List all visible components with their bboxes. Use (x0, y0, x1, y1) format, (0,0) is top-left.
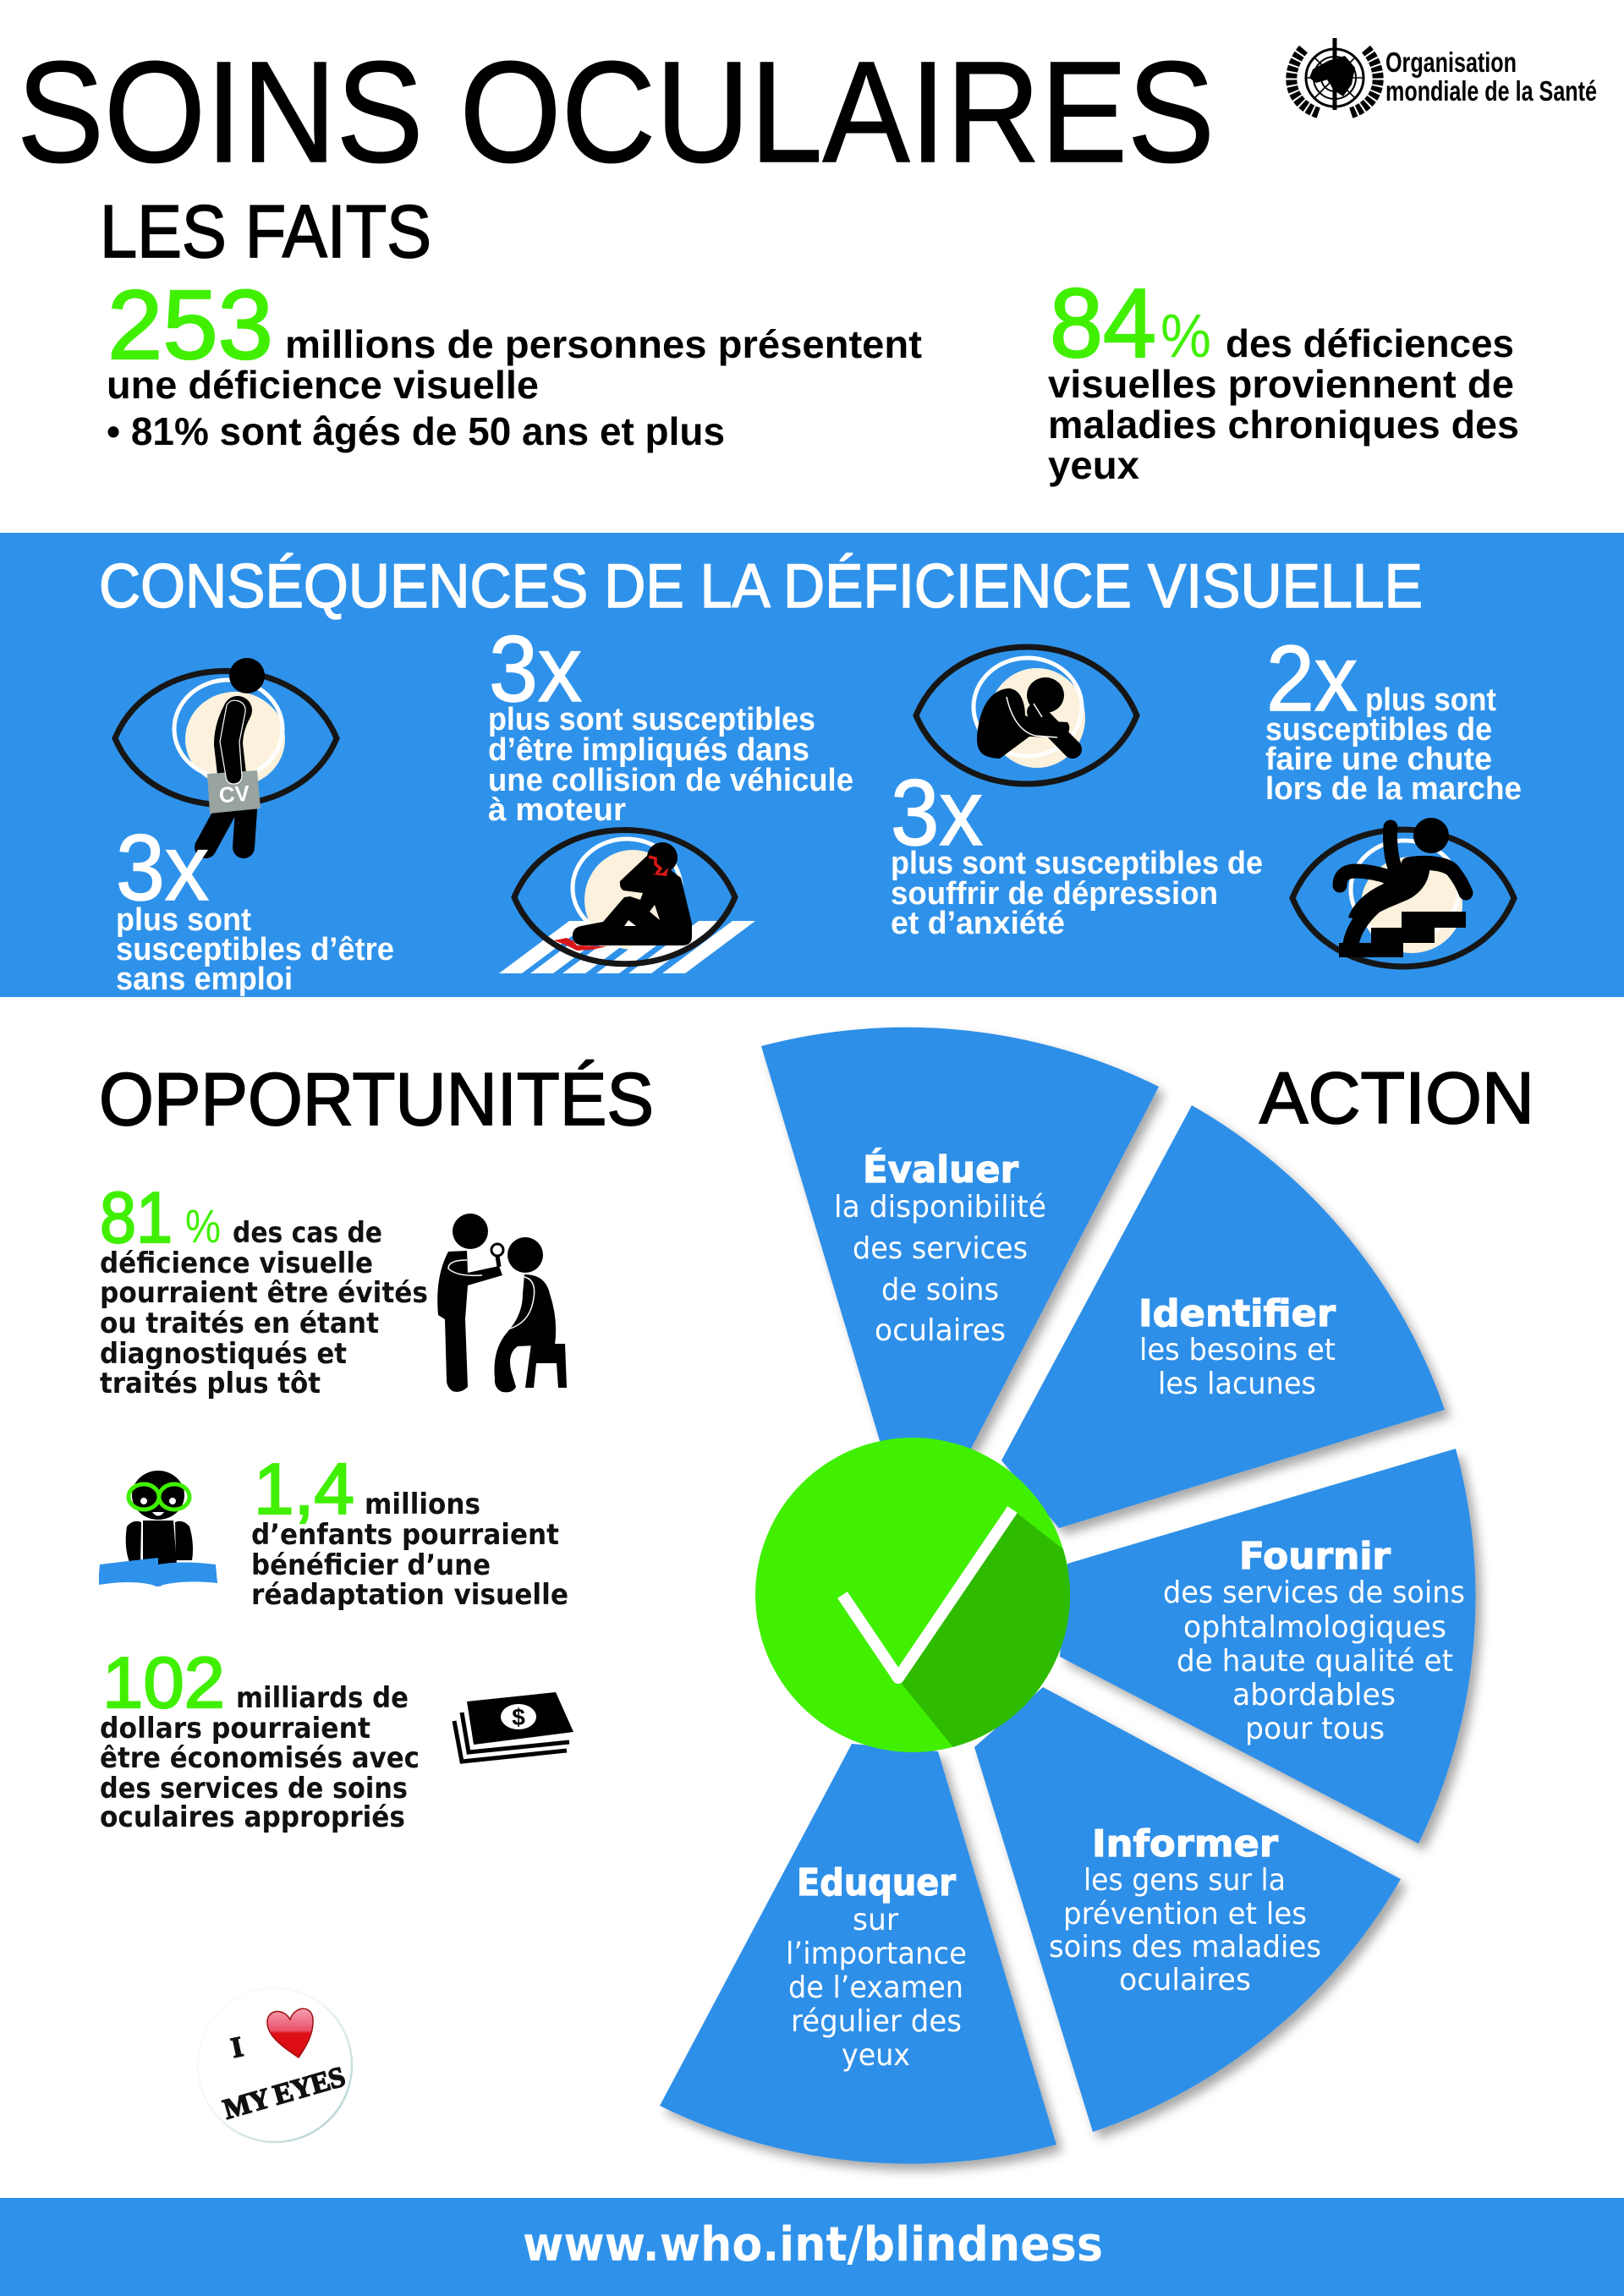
segment: fournir: des services de soins (1163, 1575, 1465, 1610)
segment: fournir (1060, 1449, 1475, 1844)
text: depression: plus sont susceptibles de (891, 846, 1263, 881)
fact: 1.4 million children: d’enfants pourraient (251, 1518, 559, 1552)
fact: 253 millions: 253 (107, 270, 273, 380)
badge: I love my eyes: I (228, 2031, 246, 2064)
fact: 81 percent avoidable: % (185, 1199, 221, 1252)
text: depression: et d’anxiété (891, 906, 1065, 941)
icon: eye with job seeker (115, 658, 337, 847)
icon: eye with depressed person (916, 647, 1137, 784)
title: SOINS OCULAIRES (17, 32, 1215, 193)
text: depression: 3x (891, 761, 983, 865)
segment: eduquer: l’importance (786, 1937, 967, 1971)
segment: informer (974, 1687, 1401, 2132)
footer: website: www.who.int/blindness (523, 2217, 1103, 2272)
fact: 102 billion dollars: oculaires appropriés (100, 1800, 405, 1834)
fact: 1.4 million children: millions (365, 1488, 480, 1521)
icon: child reading with glasses (99, 1471, 217, 1586)
heading: opportunites: OPPORTUNITÉS (99, 1057, 654, 1141)
segment: identifier: Identifier (1138, 1292, 1336, 1335)
segment: evaluer: des services (853, 1231, 1028, 1266)
text: vehicle collision: à moteur (488, 792, 626, 828)
fact: 1.4 million children: réadaptation visuelle (251, 1578, 568, 1612)
fact: 1.4 million children: 1,4 (254, 1449, 354, 1530)
fact: 81 percent avoidable: 81 (100, 1178, 173, 1258)
text: unemployment: 3x (116, 816, 209, 920)
fact: 102 billion dollars: être économisés avec (100, 1741, 420, 1775)
diagram: action wheel (660, 1027, 1475, 2164)
segment: evaluer: oculaires (875, 1313, 1006, 1348)
text: vehicle collision: plus sont susceptibles (488, 702, 815, 737)
segment: eduquer: régulier des (791, 2004, 962, 2039)
badge: I love my eyes (198, 1988, 352, 2142)
fact: 84 percent: visuelles proviennent de (1048, 362, 1514, 406)
heading: action: ACTION (1259, 1058, 1534, 1139)
segment: evaluer: de soins (881, 1273, 999, 1307)
fact: 84 percent: 84 (1050, 268, 1156, 378)
fact: 253 millions: • 81% sont âgés de 50 ans et plus (107, 409, 725, 453)
segment: eduquer (660, 1744, 1056, 2164)
segment: eduquer: sur (853, 1903, 898, 1937)
text: falls: plus sont (1365, 682, 1496, 718)
segment: eduquer: yeux (842, 2038, 910, 2073)
text: vehicle collision: 3x (489, 617, 582, 721)
icon: banknotes (454, 1692, 573, 1762)
icon: doctor examining patient (437, 1214, 567, 1392)
fact: 84 percent: des déficiences (1226, 321, 1514, 365)
logo: WHO emblem and name (1292, 38, 1597, 113)
text: falls: lors de la marche (1265, 771, 1522, 807)
text: falls (1265, 627, 1522, 807)
icon: banknotes: $ (512, 1704, 525, 1730)
segment: informer: Informer (1092, 1822, 1278, 1866)
text: unemployment: plus sont (116, 902, 251, 938)
fact: 84 percent (1048, 268, 1519, 487)
text: vehicle collision: d’être impliqués dans (488, 732, 809, 768)
badge: I love my eyes: MY EYES (220, 2061, 348, 2126)
fact: 102 billion dollars (100, 1643, 420, 1834)
text: vehicle collision: une collision de véhicule (488, 763, 853, 798)
fact: 253 millions (107, 270, 922, 453)
panel: consequences (0, 533, 1624, 997)
segment: informer: prévention et les (1063, 1897, 1307, 1932)
text: falls: susceptibles de (1265, 712, 1492, 748)
fact: 81 percent avoidable: diagnostiqués et (100, 1337, 347, 1371)
heading: consequences: CONSÉQUENCES DE LA DÉFICIENCE VISUELLE (99, 552, 1423, 621)
text: unemployment (116, 816, 394, 997)
fact: 1.4 million children (251, 1449, 568, 1612)
fact: 253 millions: millions de personnes présentent (285, 322, 922, 366)
icon: eye with falling person (1292, 818, 1514, 967)
fact: 81 percent avoidable: traités plus tôt (100, 1367, 321, 1400)
fact: 81 percent avoidable: déficience visuelle (100, 1247, 373, 1280)
fact: 253 millions: une déficience visuelle (107, 363, 539, 407)
segment: identifier: les besoins et (1139, 1333, 1336, 1367)
segment: fournir: Fournir (1239, 1535, 1391, 1578)
text: falls: 2x (1266, 627, 1358, 731)
fact: 102 billion dollars: 102 (102, 1643, 225, 1723)
footer: website (0, 2198, 1624, 2296)
fact: 102 billion dollars: des services de soins (100, 1772, 408, 1806)
segment: eduquer: Eduquer (797, 1861, 956, 1904)
fact: 84 percent: yeux (1048, 443, 1139, 487)
segment: informer: les gens sur la (1084, 1863, 1286, 1898)
fact: 81 percent avoidable: des cas de (233, 1216, 382, 1250)
heading: les faits: LES FAITS (100, 189, 431, 273)
fact: 81 percent avoidable: ou traités en étant (100, 1307, 379, 1340)
segment: evaluer (761, 1027, 1159, 1450)
text: vehicle collision (488, 617, 853, 828)
segment: identifier: les lacunes (1158, 1367, 1316, 1401)
segment: fournir: ophtalmologiques (1183, 1610, 1446, 1645)
text: unemployment: susceptibles d’être (116, 932, 394, 967)
segment: fournir: pour tous (1245, 1712, 1385, 1746)
fact: 81 percent avoidable: pourraient être évités (100, 1276, 428, 1310)
icon: eye with road accident (499, 830, 755, 973)
icon: eye with job seeker: CV (218, 781, 251, 808)
segment: informer: oculaires (1119, 1963, 1251, 1997)
logo: WHO emblem and name: Organisation (1385, 47, 1517, 78)
fact: 102 billion dollars: milliards de (236, 1681, 409, 1715)
text: unemployment: sans emploi (116, 962, 293, 997)
fact: 81 percent avoidable (100, 1178, 428, 1400)
segment: identifier (1001, 1105, 1445, 1528)
text: falls: faire une chute (1265, 742, 1492, 777)
segment: informer: soins des maladies (1049, 1930, 1321, 1964)
fact: 84 percent: maladies chroniques des (1048, 403, 1519, 447)
fact: 1.4 million children: bénéficier d’une (251, 1548, 491, 1582)
segment: evaluer: Évaluer (863, 1147, 1018, 1192)
fact: 102 billion dollars: dollars pourraient (100, 1712, 370, 1745)
segment: evaluer: la disponibilité (834, 1190, 1046, 1225)
fact: 84 percent: % (1160, 303, 1211, 370)
icon: green check circle (755, 1438, 1083, 1759)
segment: eduquer: de l’examen (788, 1970, 963, 2005)
text: depression: souffrir de dépression (891, 876, 1218, 912)
segment: fournir: abordables (1232, 1678, 1396, 1712)
text: depression (891, 761, 1263, 941)
segment: fournir: de haute qualité et (1177, 1644, 1453, 1679)
